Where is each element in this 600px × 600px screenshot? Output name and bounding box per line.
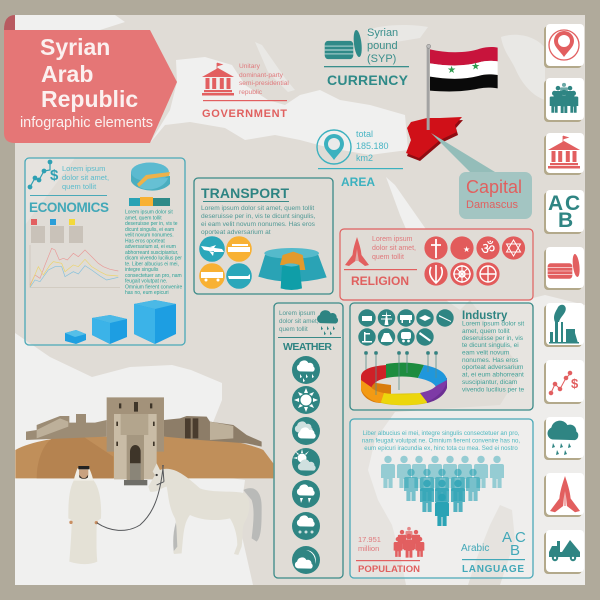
Syria map xyxy=(406,117,463,161)
3d cubes xyxy=(65,300,176,344)
economics text: te. Liber albucius ei mei, xyxy=(125,261,179,267)
panel: transport: ei eam velit novum nonumes. Has eros xyxy=(201,221,316,228)
icon: ship xyxy=(226,263,252,289)
panel: population and language: Arabic xyxy=(461,543,489,554)
government block: dominant-party xyxy=(239,72,284,79)
economics text: Lorem ipsum dolor sit xyxy=(125,210,173,216)
panel: industry: amet, quem tollit xyxy=(462,328,510,335)
icon tile: alphabet: A xyxy=(548,192,563,215)
economics text: dicam vivendo lucilius per xyxy=(125,256,182,262)
area block: 185.180 xyxy=(356,141,389,151)
panel: weather: quem tollit xyxy=(279,326,308,333)
icon: tanker xyxy=(199,263,225,289)
panel: economics: ECONOMICS xyxy=(29,200,109,215)
panel: economics: Lorem ipsum xyxy=(62,164,105,173)
panel: weather: Lorem ipsum xyxy=(279,310,315,317)
panel: transport: oporteat adversarium at xyxy=(201,229,271,236)
panel: weather: dolor sit amet, xyxy=(279,318,319,325)
government block: republic xyxy=(239,89,263,96)
sidebar tiles xyxy=(544,24,584,574)
religion symbols xyxy=(424,236,525,286)
citadel of Aleppo xyxy=(15,397,273,485)
icon tile: government xyxy=(548,136,580,168)
panel: population and language xyxy=(350,419,533,578)
ring chart xyxy=(361,363,447,405)
economics text: adversarium at, ei eum xyxy=(125,244,176,250)
pins xyxy=(364,351,438,395)
panel: population and language: nam feugait volutpat ne. Omnium fierent convenire has no, xyxy=(362,438,520,444)
economics text xyxy=(125,210,182,296)
area block: km2 xyxy=(356,153,373,163)
icon tile: trend: $ xyxy=(571,376,579,391)
flag on pole: ★ xyxy=(471,62,480,73)
panel: population and language: eum epicuri iracundia ex, hinc tota cu mea. Sed ei nostro xyxy=(364,445,518,452)
pie chart xyxy=(131,162,170,191)
panel: religion: dolor sit amet, xyxy=(372,245,416,252)
currency block xyxy=(324,27,409,88)
legend xyxy=(31,219,83,243)
panel: economics xyxy=(25,158,185,345)
icon: trend with dollar xyxy=(28,160,59,189)
icon tile: trend xyxy=(549,371,579,395)
icon tile: praying hands xyxy=(550,476,580,512)
panel: population and language: 17.951 xyxy=(358,535,381,544)
title banner: Republic xyxy=(41,86,138,112)
icon tile: alphabet: C xyxy=(565,192,580,215)
panel: transport xyxy=(194,178,333,294)
panel: industry: vivendo lucilius per te xyxy=(462,386,525,394)
economics text: deseruisse per in, vis te xyxy=(125,221,178,227)
panel: economics: dolor sit amet, xyxy=(62,173,109,182)
icon tile: coins xyxy=(548,254,581,279)
panel: industry: Industry xyxy=(462,310,508,322)
title banner: Arab xyxy=(41,61,93,87)
icon tile: people xyxy=(550,83,578,113)
flag on pole xyxy=(427,44,498,130)
panel: religion: ★ xyxy=(463,245,470,254)
icon: trend with dollar: $ xyxy=(50,167,59,184)
panel: population and language: million xyxy=(358,544,379,553)
icon: plane xyxy=(199,236,225,262)
panel: industry: suscipiantur, dicam xyxy=(462,379,517,386)
icon tile: location xyxy=(549,30,579,60)
flag on pole: ★ xyxy=(447,65,456,76)
economics text: feugait volutpat ne. xyxy=(125,278,167,284)
panel: industry: deseruisse per in, vis xyxy=(462,335,524,342)
panel: industry: at, ei eum abhorreant xyxy=(462,372,524,378)
economics text: consectetuer an pro, nam xyxy=(125,273,182,279)
icon tile: alphabet xyxy=(548,192,580,232)
panel: religion: Lorem ipsum xyxy=(372,236,413,243)
panel: weather: WEATHER xyxy=(283,341,332,353)
economics text: abhorreant suscipiantur, xyxy=(125,250,178,256)
capital callout xyxy=(431,133,532,219)
panel: industry: Lorem ipsum dolor sit xyxy=(462,320,524,328)
panel: population and language: Liber albucius ei mei, integre singulis consectetuer an pro, xyxy=(363,430,520,437)
economics text: amet, quem tollit xyxy=(125,215,162,221)
panel: industry: nonumes. Has eros xyxy=(462,357,519,364)
panel: religion: ॐ xyxy=(481,240,495,258)
economics text: Has eros oporteat xyxy=(125,238,165,244)
panel: religion: RELIGION xyxy=(351,274,409,288)
currency block: CURRENCY xyxy=(327,72,409,88)
icon: population group xyxy=(394,527,424,558)
capital callout: Capital xyxy=(466,177,522,197)
title banner xyxy=(4,15,177,143)
ring chart xyxy=(258,248,327,290)
panel: religion: quem tollit xyxy=(372,254,404,261)
stacked bar xyxy=(129,197,170,206)
government block: semi-presidential xyxy=(239,80,289,87)
icon: truck xyxy=(226,236,252,262)
panel: transport: deseruisse per in, vis te dicunt singulis, xyxy=(201,213,316,220)
title banner: infographic elements xyxy=(20,115,153,131)
panel: industry: te dicunt singulis, ei xyxy=(462,342,519,349)
icon tile: alphabet: B xyxy=(558,209,573,232)
economics text: integre singulis xyxy=(125,267,159,273)
icon tile: rain cloud xyxy=(547,421,578,455)
panel: population and language: LANGUAGE xyxy=(462,564,524,575)
economics text: Omnium fierent convenire xyxy=(125,284,182,290)
currency block: pound xyxy=(367,40,398,52)
economics text: has no, eum epicuri xyxy=(125,290,169,296)
icon tile: dump truck xyxy=(549,540,580,561)
government block: GOVERNMENT xyxy=(202,108,287,120)
currency block: Syrian xyxy=(367,27,398,39)
people chart xyxy=(381,456,504,526)
panel: population and language: C xyxy=(515,529,526,546)
panel: transport: Lorem ipsum dolor sit amet, quem tollit xyxy=(201,205,314,212)
panel: industry: oporteat adversarium xyxy=(462,364,523,371)
panel: religion xyxy=(340,229,533,300)
panel: industry xyxy=(350,303,533,410)
government block xyxy=(202,63,289,120)
line chart xyxy=(30,245,120,287)
area block: total xyxy=(356,129,373,139)
icon tile: factory xyxy=(549,305,579,344)
currency block: (SYP) xyxy=(367,53,396,65)
weather icons xyxy=(292,356,320,574)
panel: population and language: A xyxy=(502,529,512,546)
icon: praying hands xyxy=(345,237,369,266)
panel: industry: eam velit novum xyxy=(462,350,509,356)
economics text: velit novum nonumes. xyxy=(125,232,174,238)
man in white robe xyxy=(68,466,101,564)
panel: transport: TRANSPORT xyxy=(201,185,289,201)
government block: Unitary xyxy=(239,63,261,70)
industry icons xyxy=(358,309,454,346)
panel: population and language: POPULATION xyxy=(358,564,420,575)
icon: rain cloud xyxy=(317,310,338,335)
panel: population and language: B xyxy=(510,542,520,559)
white horse xyxy=(97,463,262,555)
panel: weather xyxy=(274,303,343,578)
area block xyxy=(317,129,403,189)
area block: AREA xyxy=(341,175,375,189)
capital callout: Damascus xyxy=(466,199,518,211)
economics text: dicunt singulis, ei eam xyxy=(125,227,174,233)
title banner: Syrian xyxy=(40,34,110,60)
panel: economics: quem tollit xyxy=(62,182,97,191)
